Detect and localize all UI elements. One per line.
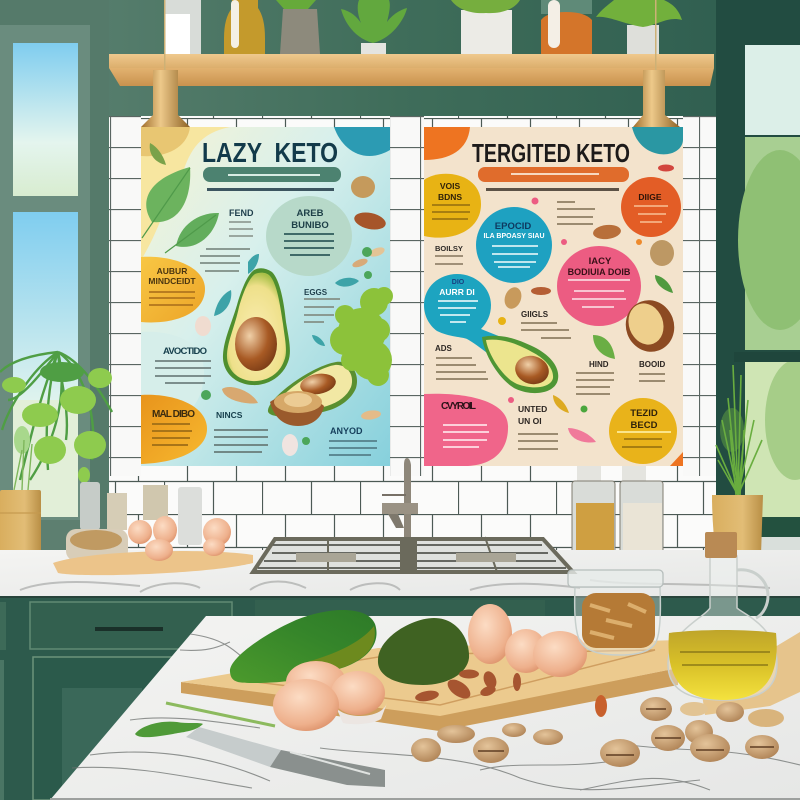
lettuce — [330, 287, 393, 386]
walnuts on marble — [411, 697, 784, 767]
block: fend: FEND — [229, 208, 254, 218]
yellow callout: top — [141, 257, 205, 322]
back board with eggs — [53, 516, 253, 575]
almond stick — [222, 387, 258, 403]
herb leaf — [135, 703, 275, 737]
egg bottom — [282, 434, 298, 456]
pink callout: CVYROIL — [441, 401, 476, 412]
block: ads: ADS — [435, 344, 453, 353]
leaf top — [150, 143, 166, 165]
oil bottle — [668, 532, 777, 700]
avocado half small — [268, 362, 357, 417]
large nut — [619, 293, 681, 359]
block: bood: BOOID — [639, 360, 665, 369]
leaf large — [142, 167, 190, 238]
circle: yellow bottom: TEZID — [630, 408, 658, 419]
text block: top middle — [557, 201, 595, 225]
block: eggs — [304, 288, 340, 323]
lower cabinets — [0, 596, 800, 800]
circle: yellow top — [424, 174, 481, 238]
leaves — [553, 275, 673, 442]
circle: teal center — [476, 207, 552, 283]
avocado half large — [223, 268, 290, 385]
circle: orange: DIIGE — [638, 192, 662, 202]
island front edge — [50, 798, 800, 800]
right cutting board — [700, 632, 800, 715]
block: avocado — [155, 346, 211, 384]
circle: yellow top: VOIS — [440, 181, 460, 191]
block: nincs — [214, 410, 268, 453]
block: united oil: UNTED — [518, 404, 547, 414]
almonds — [351, 246, 386, 421]
circle: yellow bottom: BECD — [631, 420, 658, 431]
block: anyod: ANYOD — [330, 426, 363, 436]
stove — [253, 537, 573, 573]
wooden shelf — [109, 54, 714, 86]
nuts and dots — [498, 164, 674, 412]
yellow callout: top: AUBUR — [157, 266, 187, 276]
nut: pecan — [353, 210, 387, 232]
block: small label left: BOILSY — [435, 244, 463, 253]
nut bowl — [270, 391, 324, 426]
block: united oil — [518, 404, 558, 450]
subtitle banner — [478, 167, 629, 182]
block: gigls — [521, 310, 571, 339]
yellow callout: top: MINDCEIDT — [148, 276, 196, 286]
speech bubble: teal: AURR DI — [439, 287, 475, 297]
block: eggs: EGGS — [304, 288, 328, 297]
egg illustration — [195, 316, 211, 336]
heading: targeted keto: TERGITED KETO — [472, 138, 630, 168]
block: hind: HIND — [589, 360, 609, 369]
pink callout — [424, 394, 508, 466]
tagline line — [486, 188, 619, 191]
circle: areb bunibo: BUNIBO — [291, 220, 329, 231]
circle: pink: BODIUIA DOIB — [568, 267, 631, 277]
knife — [186, 727, 385, 787]
block: nincs: NINCS — [216, 410, 243, 420]
speech bubble: teal: DIO — [452, 279, 465, 286]
herb plant right — [712, 365, 763, 555]
right window — [716, 0, 800, 551]
window-sill bottles — [80, 482, 202, 545]
circle: teal center: EPOCID — [495, 221, 531, 232]
subtitle banner — [203, 167, 341, 182]
marble island — [50, 616, 800, 800]
block: small label left — [435, 244, 463, 265]
pendant lamp left — [141, 0, 190, 127]
eggs front with glass — [273, 661, 387, 731]
glass jar with nuts — [568, 570, 663, 655]
block: united oil: UN OI — [518, 416, 542, 426]
round avocado — [378, 618, 469, 685]
circle: orange — [621, 177, 681, 237]
circle: pink: IACY — [589, 256, 612, 267]
circle: areb bunibo — [266, 196, 352, 276]
kitchen faucet — [382, 458, 418, 545]
orange callout: bottom — [141, 395, 207, 464]
poster: lazy keto — [141, 127, 393, 466]
circle: teal center: ILA BPOASY SIAU — [483, 233, 545, 240]
heading: lazy keto: LAZY KETO — [202, 137, 338, 168]
block: bood — [639, 360, 665, 382]
green dots — [201, 390, 310, 445]
circle: areb bunibo: AREB — [297, 208, 324, 219]
block: fend — [229, 208, 254, 237]
back marble counter — [0, 550, 800, 596]
circle: yellow top: BDNS — [438, 192, 462, 202]
shelf items: jars and plants — [164, 0, 682, 54]
left window — [0, 0, 109, 550]
block: gigls: GIIGLS — [521, 310, 549, 319]
nut: walnut — [351, 176, 375, 198]
block: ads — [435, 344, 488, 380]
cutting board — [181, 640, 680, 731]
spice jars — [572, 466, 663, 557]
circle: pink — [557, 246, 641, 326]
eggs on board — [468, 604, 587, 677]
tagline line — [207, 188, 334, 191]
circle: yellow bottom — [609, 398, 677, 464]
teal leaves — [214, 254, 359, 346]
subway tile wall — [109, 116, 716, 553]
block: anyod — [329, 426, 377, 456]
speech bubble: teal — [424, 274, 532, 377]
herb plant left — [0, 352, 112, 555]
avocado half — [482, 336, 558, 393]
orange callout: bottom: MAL DIBO — [152, 409, 195, 420]
almonds on board — [414, 669, 607, 717]
long avocado — [230, 610, 377, 683]
leaf small — [165, 213, 219, 253]
block: avocado: AVOCTIDO — [163, 346, 207, 357]
pendant lamp right — [633, 0, 680, 127]
block: intro text — [200, 248, 250, 272]
block: hind — [576, 360, 614, 395]
poster: targeted keto — [424, 127, 683, 466]
